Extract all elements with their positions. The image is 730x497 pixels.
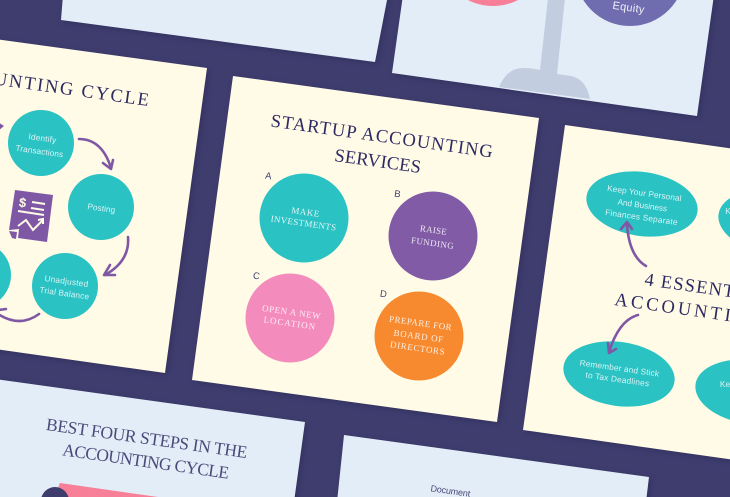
service: make investments bbox=[260, 174, 348, 262]
label A: A bbox=[264, 171, 273, 183]
pink step bar bbox=[52, 483, 200, 497]
panel: best four steps bbox=[0, 379, 305, 497]
service: raise funding: RAISE bbox=[419, 223, 448, 237]
purple scale pan bbox=[575, 0, 685, 26]
step: partially cropped circle bbox=[0, 242, 11, 308]
card background bbox=[0, 39, 207, 373]
heading: best four steps: ACCOUNTING CYCLE bbox=[61, 439, 230, 483]
heading: best four steps: BEST FOUR STEPS IN THE bbox=[45, 414, 249, 462]
card background bbox=[392, 0, 714, 116]
arrow: trial balance to next step bbox=[0, 309, 39, 321]
panel: balance scale card bbox=[392, 0, 714, 116]
label B: B bbox=[393, 189, 401, 200]
arrow: down to tax tip bbox=[608, 315, 638, 353]
service: raise funding bbox=[388, 192, 478, 280]
step: unadjusted trial balance: Trial Balance bbox=[39, 285, 90, 302]
panel: document card bbox=[337, 435, 649, 497]
service: open a new location: OPEN A NEW bbox=[262, 303, 322, 321]
equity label: Equity bbox=[612, 0, 646, 16]
service: prepare for board of directors: PREPARE FOR bbox=[389, 314, 452, 332]
service: open a new location bbox=[246, 274, 334, 362]
service: prepare for board of directors: DIRECTORS bbox=[389, 339, 445, 357]
card background bbox=[337, 435, 649, 497]
service: prepare for board of directors bbox=[374, 292, 464, 380]
arrow: posting to trial balance bbox=[104, 237, 128, 275]
tip: keep finances separate: And Business bbox=[617, 197, 668, 213]
icon: financial document bbox=[9, 190, 53, 242]
step: unadjusted trial balance: Unadjusted bbox=[44, 273, 89, 289]
tip: keep finances separate: Finances Separate bbox=[605, 207, 679, 227]
arrow: identify to posting bbox=[79, 139, 113, 169]
icon: scale pole and base bbox=[499, 0, 590, 99]
card background bbox=[0, 379, 305, 497]
tip: tax deadlines: to Tax Deadlines bbox=[585, 370, 650, 388]
heading: startup accounting services: STARTUP ACCOUNTING bbox=[269, 112, 494, 163]
heading: 4 essential accounting bbox=[613, 270, 730, 331]
tip: cropped lower right: Ke bbox=[720, 379, 730, 389]
label D: D bbox=[379, 289, 388, 300]
step: identify transactions: Identify bbox=[28, 131, 58, 145]
tip: cropped lower right bbox=[691, 353, 730, 431]
tip: keep finances separate: Keep Your Personal bbox=[607, 183, 682, 203]
heading: startup accounting services: SERVICES bbox=[333, 146, 422, 178]
step: unadjusted trial balance bbox=[32, 253, 98, 319]
dark step marker bbox=[41, 487, 69, 497]
panel: startup accounting services bbox=[192, 76, 539, 422]
tip: keep finances separate bbox=[582, 165, 702, 243]
card background bbox=[523, 125, 730, 460]
tip: tax deadlines: Remember and Stick bbox=[579, 358, 661, 379]
arrow: up to first tip bbox=[621, 222, 646, 266]
service: raise funding: FUNDING bbox=[410, 235, 455, 251]
card background bbox=[192, 76, 539, 422]
service: make investments: INVESTMENTS bbox=[270, 213, 337, 233]
pink scale pan bbox=[438, 0, 548, 6]
step: posting: Posting bbox=[87, 201, 116, 215]
panel: top-left pale card bbox=[61, 0, 388, 62]
panel: accounting cycle bbox=[0, 39, 207, 373]
label C: C bbox=[252, 271, 261, 282]
panel: 4 essential accounting bbox=[523, 125, 730, 460]
arrow tip entering identify bbox=[0, 122, 4, 131]
service: make investments: MAKE bbox=[291, 205, 320, 219]
service: prepare for board of directors: BOARD OF bbox=[393, 328, 444, 344]
tip: cropped upper right bbox=[714, 183, 730, 261]
step: identify transactions: Transactions bbox=[15, 143, 64, 159]
icon: financial document: $ bbox=[18, 195, 28, 211]
step: posting bbox=[68, 174, 134, 240]
service: open a new location: LOCATION bbox=[263, 314, 316, 332]
tip: tax deadlines bbox=[559, 335, 679, 413]
step: identify transactions bbox=[8, 110, 74, 176]
